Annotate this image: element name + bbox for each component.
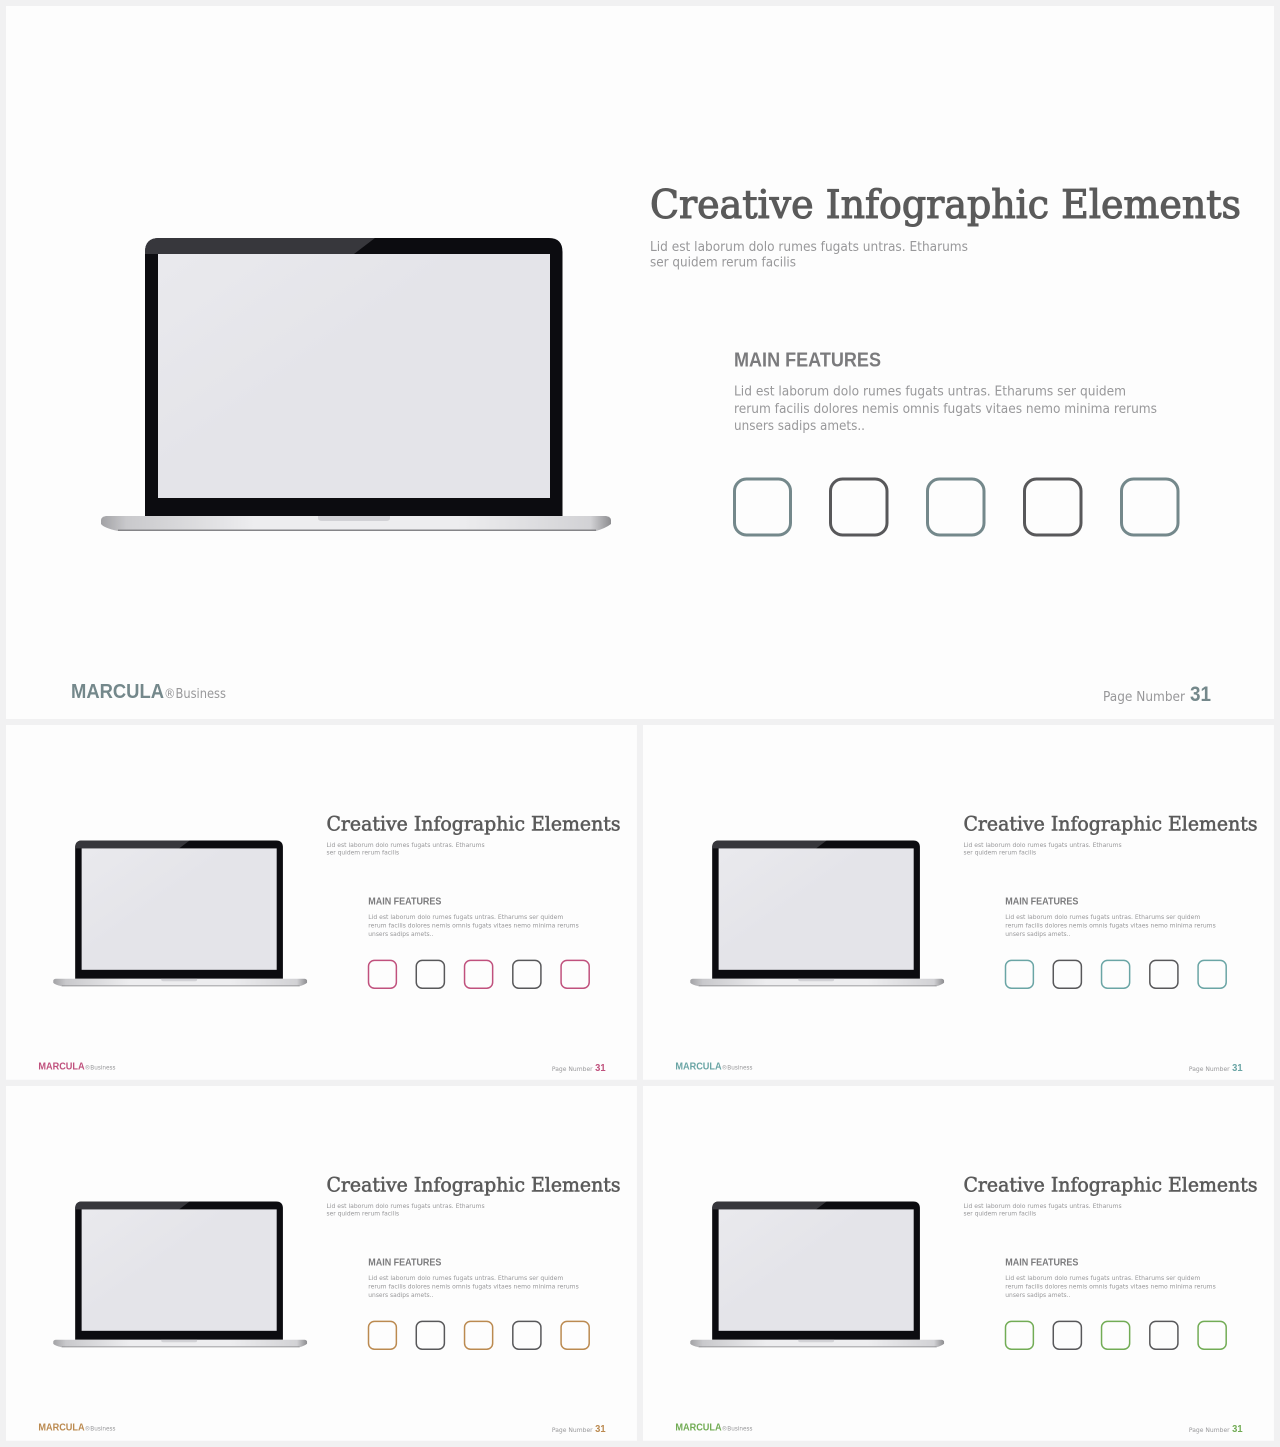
laptop	[690, 840, 944, 986]
title: Creative Infographic Elements	[650, 183, 1241, 228]
features paragraph: unsers sadips amets..	[368, 1291, 433, 1299]
icon placeholders	[734, 479, 1178, 535]
subtitle: ser quidem rerum facilis	[963, 849, 1037, 857]
page number: Page Number	[1189, 1065, 1230, 1073]
features paragraph	[734, 384, 1157, 434]
page number: 31	[595, 1424, 606, 1435]
page number: Page Number	[1189, 1426, 1230, 1434]
features paragraph: rerum facilis dolores nemis omnis fugats vitaes nemo minima rerums	[368, 1283, 579, 1291]
title: Creative Infographic Elements	[963, 812, 1258, 835]
subtitle	[326, 1202, 485, 1218]
features paragraph: unsers sadips amets..	[1005, 1291, 1070, 1299]
features paragraph: Lid est laborum dolo rumes fugats untras. Etharums ser quidem	[734, 384, 1126, 400]
features paragraph: rerum facilis dolores nemis omnis fugats vitaes nemo minima rerums	[1005, 1283, 1216, 1291]
brand: ®Business	[722, 1063, 753, 1071]
laptop	[690, 1201, 944, 1347]
panel: small slide (orange)	[6, 1086, 637, 1441]
features paragraph	[368, 913, 579, 938]
brand	[38, 1422, 116, 1433]
features paragraph: rerum facilis dolores nemis omnis fugats vitaes nemo minima rerums	[1005, 922, 1216, 930]
page number: Page Number	[1103, 690, 1186, 705]
brand: ®Business	[722, 1424, 753, 1432]
features paragraph	[1005, 913, 1216, 938]
subtitle: Lid est laborum dolo rumes fugats untras. Etharums	[326, 841, 485, 849]
brand: MARCULA	[675, 1061, 722, 1072]
brand: MARCULA	[71, 681, 164, 703]
features paragraph: unsers sadips amets..	[734, 419, 865, 434]
features paragraph: unsers sadips amets..	[1005, 930, 1070, 938]
brand: MARCULA	[38, 1061, 85, 1072]
features paragraph: Lid est laborum dolo rumes fugats untras. Etharums ser quidem	[368, 1274, 563, 1282]
laptop	[53, 840, 307, 986]
page number: 31	[1232, 1063, 1243, 1074]
heading: main features: MAIN FEATURES	[368, 1257, 442, 1268]
icon placeholders	[369, 960, 589, 988]
subtitle	[650, 240, 968, 270]
panel: small slide (teal)	[643, 725, 1274, 1080]
heading: main features: MAIN FEATURES	[1005, 896, 1079, 907]
brand	[71, 681, 226, 703]
features paragraph: Lid est laborum dolo rumes fugats untras. Etharums ser quidem	[1005, 1274, 1200, 1282]
heading: main features: MAIN FEATURES	[734, 350, 881, 372]
subtitle: Lid est laborum dolo rumes fugats untras. Etharums	[963, 841, 1122, 849]
page number	[1103, 683, 1211, 706]
laptop	[101, 238, 611, 531]
features paragraph: rerum facilis dolores nemis omnis fugats vitaes nemo minima rerums	[734, 402, 1157, 417]
page number: 31	[1190, 683, 1211, 706]
brand: ®Business	[85, 1424, 116, 1432]
features paragraph: rerum facilis dolores nemis omnis fugats vitaes nemo minima rerums	[368, 922, 579, 930]
brand: ®Business	[85, 1063, 116, 1071]
subtitle	[963, 1202, 1122, 1218]
features paragraph: unsers sadips amets..	[368, 930, 433, 938]
panel: small slide (pink)	[6, 725, 637, 1080]
icon placeholders	[369, 1321, 589, 1349]
subtitle: Lid est laborum dolo rumes fugats untras. Etharums	[650, 240, 968, 255]
features paragraph	[1005, 1274, 1216, 1299]
title: Creative Infographic Elements	[326, 812, 621, 835]
brand	[675, 1422, 753, 1433]
features paragraph: Lid est laborum dolo rumes fugats untras. Etharums ser quidem	[368, 913, 563, 921]
heading: main features: MAIN FEATURES	[368, 896, 442, 907]
page number	[552, 1424, 606, 1435]
features paragraph: Lid est laborum dolo rumes fugats untras. Etharums ser quidem	[1005, 913, 1200, 921]
heading: main features: MAIN FEATURES	[1005, 1257, 1079, 1268]
page number	[552, 1063, 606, 1074]
subtitle: Lid est laborum dolo rumes fugats untras. Etharums	[326, 1202, 485, 1210]
brand: ®Business	[164, 687, 226, 702]
page number	[1189, 1063, 1243, 1074]
icon placeholders	[1006, 960, 1226, 988]
subtitle: ser quidem rerum facilis	[650, 256, 796, 270]
features paragraph	[368, 1274, 579, 1299]
subtitle: ser quidem rerum facilis	[963, 1210, 1037, 1218]
subtitle: ser quidem rerum facilis	[326, 1210, 400, 1218]
page number: Page Number	[552, 1426, 593, 1434]
brand	[675, 1061, 753, 1072]
laptop	[53, 1201, 307, 1347]
brand	[38, 1061, 116, 1072]
icon placeholders	[1006, 1321, 1226, 1349]
subtitle	[326, 841, 485, 857]
page number: 31	[595, 1063, 606, 1074]
subtitle: Lid est laborum dolo rumes fugats untras. Etharums	[963, 1202, 1122, 1210]
title: Creative Infographic Elements	[326, 1173, 621, 1196]
panel: small slide (green)	[643, 1086, 1274, 1441]
panel: large slide (slate)	[6, 6, 1274, 719]
subtitle	[963, 841, 1122, 857]
page number: Page Number	[552, 1065, 593, 1073]
brand: MARCULA	[675, 1422, 722, 1433]
page number	[1189, 1424, 1243, 1435]
brand: MARCULA	[38, 1422, 85, 1433]
title: Creative Infographic Elements	[963, 1173, 1258, 1196]
page number: 31	[1232, 1424, 1243, 1435]
subtitle: ser quidem rerum facilis	[326, 849, 400, 857]
